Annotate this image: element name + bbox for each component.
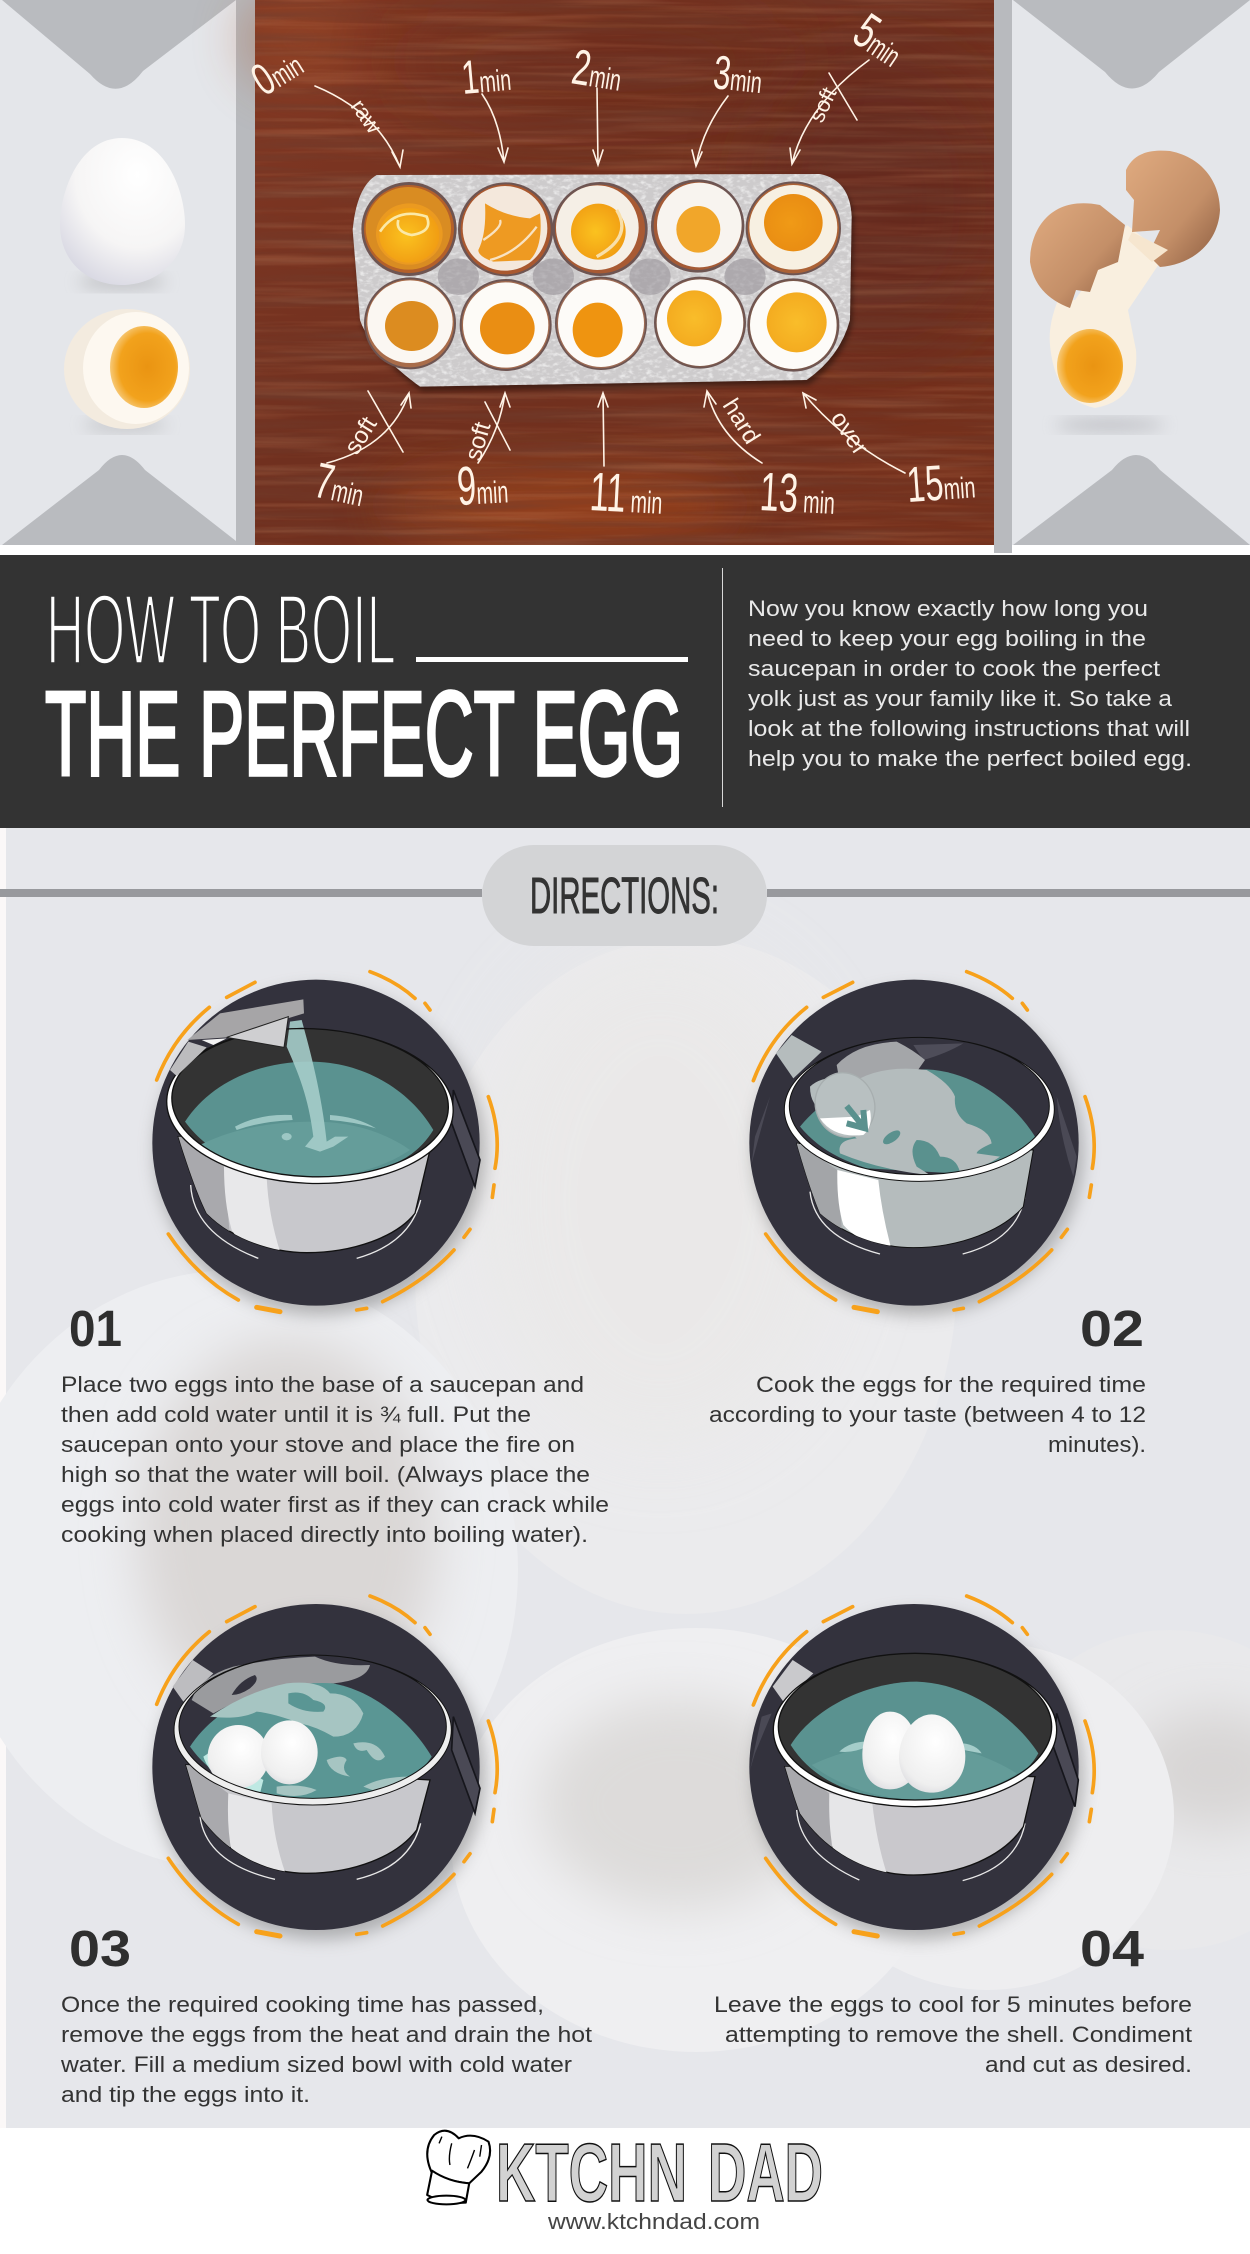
time labels: 3min (711, 46, 765, 104)
step 1 text: eggs into cold water first as if they can crack while (61, 1492, 609, 1517)
intro paragraph: help you to make the perfect boiled egg. (748, 746, 1192, 771)
time labels: raw (346, 95, 387, 138)
step 1 text: high so that the water will boil. (Always place the (61, 1462, 590, 1487)
time labels: 1min (459, 47, 513, 105)
step 2 number: 02 (1080, 1300, 1144, 1357)
intro paragraph: Now you know exactly how long you (748, 596, 1148, 621)
footer logo (0, 2126, 1250, 2254)
heading: how to boil: HOW TO BOIL (46, 574, 396, 686)
time labels: 15min (905, 452, 977, 513)
step 3 text (60, 1992, 593, 2107)
step 2 illustration: cooking with foam (749, 972, 1094, 1315)
time labels: soft (339, 412, 383, 459)
white separator band (0, 545, 994, 555)
time labels (243, 3, 977, 526)
step 1 illustration: filling saucepan (152, 972, 497, 1315)
time labels: 7min (310, 452, 370, 517)
website url: www.ktchndad.com (547, 2209, 760, 2234)
directions header: DIRECTIONS: (530, 867, 719, 924)
egg 11 min (557, 278, 645, 368)
egg 1 min (461, 184, 551, 274)
icon: whole white egg (60, 138, 185, 289)
step 3 text: Once the required cooking time has passed, (61, 1992, 544, 2017)
step 2 text: Cook the eggs for the required time (756, 1372, 1146, 1397)
step 1 text (61, 1372, 609, 1547)
step 2 text: minutes). (1048, 1432, 1146, 1457)
logo wordmark: KTCHN (496, 2126, 687, 2219)
intro paragraph: yolk just as your family like it. So take a (748, 686, 1173, 711)
intro paragraph (748, 596, 1192, 771)
step 3 illustration: draining with eggs (152, 1596, 497, 1939)
step 4 text: attempting to remove the shell. Condiment (725, 2022, 1193, 2047)
step 2 text (709, 1372, 1146, 1457)
icon: chef hat (427, 2131, 490, 2204)
left egg panel (0, 0, 255, 546)
heading: the perfect egg: THE PERFECT EGG (45, 667, 683, 801)
egg 2 min (555, 185, 645, 273)
time labels: over (825, 406, 874, 460)
intro paragraph: need to keep your egg boiling in the (748, 626, 1146, 651)
time labels: soft (460, 419, 497, 464)
step 4 text: and cut as desired. (985, 2052, 1192, 2077)
time labels: soft (804, 83, 842, 126)
step 4 number: 04 (1080, 1920, 1145, 1977)
egg 9 min (462, 281, 550, 369)
logo wordmark: DAD (708, 2126, 823, 2219)
egg 5 min (748, 183, 839, 273)
intro paragraph: saucepan in order to cook the perfect (748, 656, 1161, 681)
step 4 text: Leave the eggs to cool for 5 minutes before (714, 1992, 1192, 2017)
title banner (0, 555, 1250, 828)
egg tray (353, 174, 854, 391)
intro paragraph: look at the following instructions that will (748, 716, 1190, 741)
time labels: 11 min (588, 461, 664, 526)
step 3 number: 03 (69, 1920, 131, 1977)
right cracked egg panel (994, 0, 1250, 553)
egg 3 min (654, 182, 742, 270)
egg 13 min (656, 278, 744, 367)
egg 7 min (366, 279, 454, 367)
step 3 text: and tip the eggs into it. (61, 2082, 310, 2107)
step 1 text: then add cold water until it is ¾ full. Put the (61, 1402, 531, 1427)
time labels: 13 min (758, 461, 837, 526)
step 3 text: water. Fill a medium sized bowl with cold water (60, 2052, 573, 2077)
step 4 text (714, 1992, 1193, 2077)
title rule (416, 657, 688, 662)
timing arrows (315, 60, 905, 473)
time labels: hard (717, 394, 765, 449)
step 3 text: remove the eggs from the heat and drain the hot (61, 2022, 593, 2047)
step 1 text: Place two eggs into the base of a saucepan and (61, 1372, 584, 1397)
directions header (0, 845, 1250, 946)
time labels: 5min (844, 3, 917, 77)
wood photo with egg tray (240, 0, 1000, 546)
directions background (0, 828, 1250, 2128)
egg 0 min raw (364, 185, 454, 273)
icon: halved boiled egg (64, 309, 190, 431)
step 1 text: cooking when placed directly into boiling water). (61, 1522, 588, 1547)
step 4 illustration: cooling eggs (749, 1596, 1094, 1939)
time labels: 0min (243, 37, 311, 106)
step 2 text: according to your taste (between 4 to 12 (709, 1402, 1146, 1427)
step 1 number: 01 (69, 1300, 122, 1357)
icon: cracked egg (1030, 151, 1220, 431)
egg 15 min (749, 280, 838, 370)
time labels: 9min (455, 453, 509, 517)
step 1 text: saucepan onto your stove and place the fire on (61, 1432, 575, 1457)
time labels: 2min (568, 39, 626, 101)
